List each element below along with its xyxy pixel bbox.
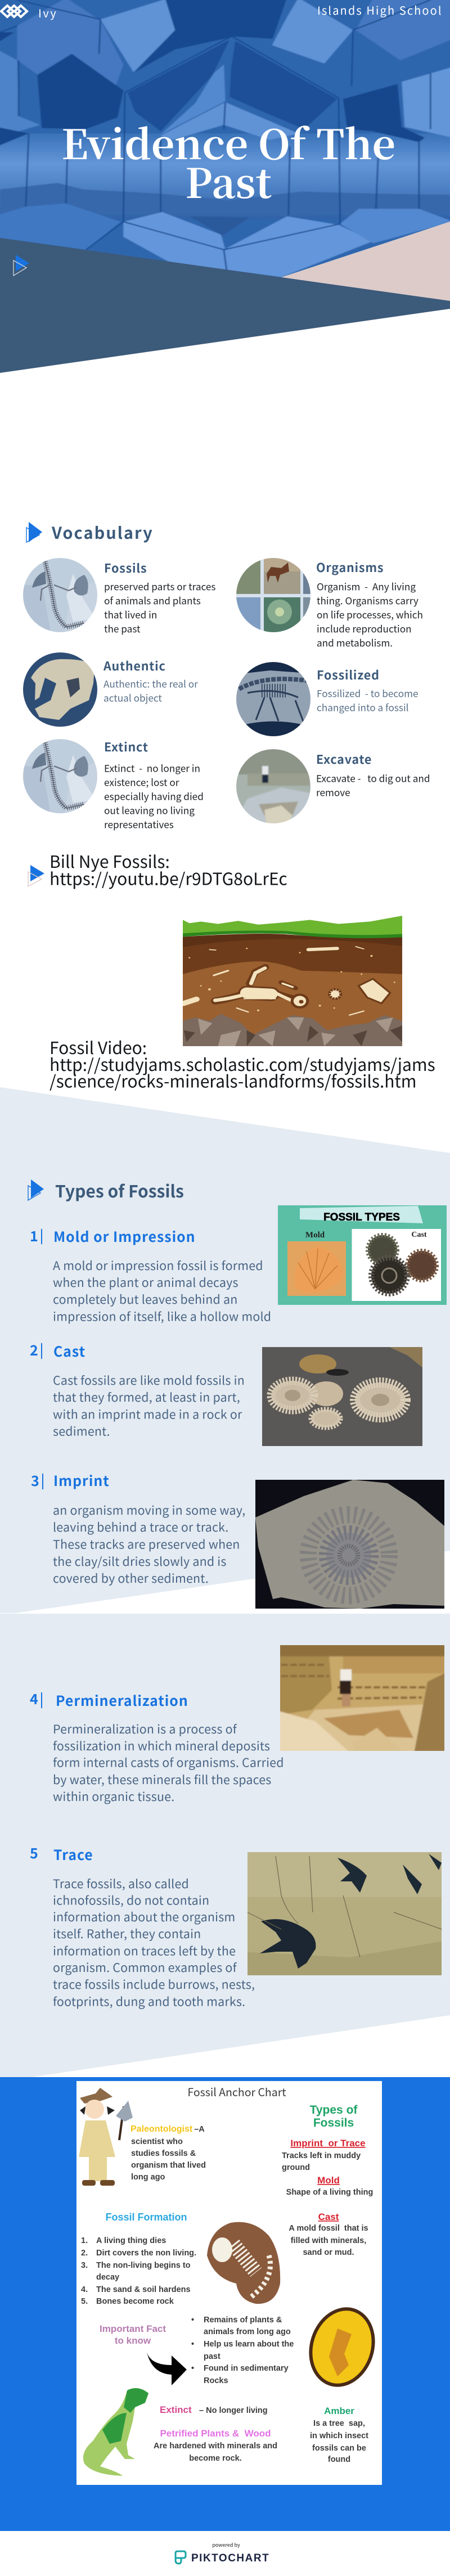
pink corner shape bbox=[281, 222, 450, 301]
number 3 bbox=[31, 1470, 43, 1490]
footer: powered by piktochart bbox=[176, 2541, 269, 2564]
petrified heading: Petrified Plants & Wood bbox=[160, 2428, 271, 2439]
permineralization description: form internal casts of organisms. Carried bbox=[53, 1754, 284, 1771]
cast ammonites photo bbox=[262, 1347, 422, 1446]
fossilized text: Fossilized bbox=[317, 666, 380, 683]
mold description: when the plant or animal decays bbox=[53, 1273, 238, 1291]
palaeontologist definition: Paleontologist bbox=[130, 2124, 193, 2134]
trace description: footprints, dung and tooth marks. bbox=[53, 1992, 245, 2010]
excavate photo bbox=[236, 749, 310, 823]
palaeontologist definition: long ago bbox=[131, 2173, 165, 2182]
fossil formation steps: decay bbox=[96, 2273, 119, 2282]
fossils photo bbox=[23, 558, 97, 632]
imprint heading: Imprint bbox=[53, 1470, 110, 1490]
fossils text: that lived in bbox=[104, 607, 157, 621]
school name: Islands High School bbox=[317, 2, 443, 18]
t-rex bbox=[83, 2388, 148, 2476]
fossil video link: http://studyjams.scholastic.com/studyjams/jams bbox=[50, 1051, 435, 1076]
types of fossils subheading: Types of bbox=[310, 2104, 358, 2116]
amber definition: Is a tree sap, bbox=[313, 2419, 365, 2428]
number 3: 3 bbox=[31, 1470, 39, 1490]
footer: powered by piktochart: powered by bbox=[212, 2541, 240, 2548]
extinct text: Extinct - no longer in bbox=[104, 760, 200, 775]
extinct text: out leaving no living bbox=[104, 803, 195, 817]
number 5: 5 bbox=[30, 1843, 38, 1863]
cast description: that they formed, at least in part, bbox=[53, 1388, 240, 1406]
vocabulary heading icon bbox=[26, 522, 42, 542]
title: Evidence Of The bbox=[61, 112, 395, 171]
types of fossils subheading: Fossils bbox=[313, 2116, 354, 2129]
extinct text: representatives bbox=[104, 817, 174, 831]
authentic text: actual object bbox=[104, 691, 162, 704]
palaeontologist figure bbox=[79, 2088, 133, 2186]
fossilized text: Fossilized - to become bbox=[317, 686, 418, 700]
extinct definition: – No longer living bbox=[199, 2406, 268, 2415]
fossils text: preserved parts or traces bbox=[104, 579, 215, 593]
palaeontologist definition: studies fossils & bbox=[131, 2149, 196, 2158]
amber heading: Amber bbox=[324, 2406, 354, 2416]
fossil types picture: FOSSIL TYPES bbox=[323, 1212, 400, 1223]
fossils text: of animals and plants bbox=[104, 593, 201, 607]
fossil formation steps: 2. bbox=[81, 2249, 88, 2258]
type 3: imprint bbox=[31, 1470, 245, 1587]
term: authentic bbox=[23, 652, 198, 727]
term: fossilized bbox=[236, 662, 418, 736]
cast description: sediment. bbox=[53, 1422, 110, 1440]
dark banner shape bbox=[0, 238, 450, 373]
important facts list: • bbox=[191, 2340, 194, 2349]
important fact label: to know bbox=[115, 2335, 151, 2346]
authentic text: Authentic: the real or bbox=[104, 676, 198, 691]
trace description: information on traces left by the bbox=[53, 1942, 236, 1960]
cast description: with an imprint made in a rock or bbox=[53, 1405, 242, 1423]
extinct text: especially having died bbox=[104, 789, 204, 803]
fossil types picture: Cast bbox=[411, 1231, 427, 1239]
important facts list: • bbox=[191, 2364, 194, 2373]
important fact label: Important Fact bbox=[100, 2323, 166, 2334]
imprint description: These tracks are preserved when bbox=[53, 1535, 240, 1552]
important facts list: past bbox=[204, 2352, 220, 2361]
cast definition: sand or mud. bbox=[303, 2248, 354, 2257]
fossil formation steps: The sand & soil hardens bbox=[96, 2285, 191, 2294]
fossilized photo bbox=[236, 662, 310, 736]
important facts list: Found in sedimentary bbox=[204, 2364, 289, 2373]
fossils text: Fossils bbox=[104, 559, 147, 577]
imprint fossil photo bbox=[255, 1480, 444, 1609]
term: fossils bbox=[23, 558, 215, 634]
permineralization description: fossilization in which mineral deposits bbox=[53, 1737, 270, 1754]
important facts list: • bbox=[191, 2316, 194, 2325]
types heading icon bbox=[28, 1179, 44, 1200]
fossil formation steps: 1. bbox=[81, 2236, 88, 2245]
permineralization photo bbox=[280, 1645, 444, 1751]
imprint description: an organism moving in some way, bbox=[53, 1501, 245, 1519]
extinct text: Extinct bbox=[104, 738, 148, 755]
excavate text: Excavate bbox=[316, 750, 372, 768]
number 4: 4 bbox=[30, 1688, 38, 1709]
fossil formation steps: Dirt covers the non living. bbox=[96, 2249, 196, 2258]
important facts list: Remains of plants & bbox=[204, 2316, 282, 2325]
types heading: Types of Fossils bbox=[55, 1178, 184, 1203]
palaeontologist definition: organism that lived bbox=[131, 2161, 206, 2170]
trace description: Trace fossils, also called bbox=[53, 1875, 189, 1892]
cast description: Cast fossils are like mold fossils in bbox=[53, 1371, 245, 1389]
light section background: lower types bbox=[0, 1614, 450, 2077]
organisms text: and metabolism. bbox=[317, 636, 393, 649]
hero play icon bbox=[14, 255, 29, 276]
petrified definition: Are hardened with minerals and bbox=[154, 2442, 277, 2451]
permineralization description: Permineralization is a process of bbox=[53, 1720, 237, 1737]
skeleton in rock bbox=[207, 2222, 280, 2304]
imprint definition: ground bbox=[282, 2163, 310, 2172]
type 4: permineralization bbox=[30, 1688, 284, 1805]
amber definition: found bbox=[328, 2455, 350, 2464]
fossil formation steps: 3. bbox=[81, 2261, 88, 2270]
mold: Mold bbox=[317, 2175, 340, 2186]
fossil video link: /science/rocks-minerals-landforms/fossils.htm bbox=[50, 1068, 417, 1092]
fossil video link: Fossil Video: bbox=[50, 1034, 147, 1059]
extinct photo bbox=[23, 739, 97, 813]
soil layers illustration with fossils bbox=[183, 916, 402, 1046]
authentic text: Authentic bbox=[103, 657, 166, 674]
logo: diamonds bbox=[1, 6, 27, 17]
mold description: completely but leaves behind an bbox=[53, 1290, 237, 1308]
blue section background bbox=[0, 2077, 450, 2531]
trace description: itself. Rather, they contain bbox=[53, 1925, 201, 1942]
fossil anchor chart bbox=[76, 2081, 383, 2485]
important facts list: Rocks bbox=[204, 2376, 228, 2385]
imprint definition: Tracks left in muddy bbox=[282, 2151, 361, 2160]
excavate text: remove bbox=[316, 785, 350, 799]
trace description: organism. Common examples of bbox=[53, 1958, 237, 1976]
piktochart logo mark bbox=[176, 2551, 186, 2564]
permineralization description: by water, these minerals fill the spaces bbox=[53, 1771, 271, 1788]
hero photo: glass facets bbox=[0, 0, 450, 285]
cast heading: Cast bbox=[53, 1341, 86, 1361]
cast definition: filled with minerals, bbox=[291, 2236, 366, 2245]
organisms text: Organisms bbox=[316, 559, 384, 576]
imprint description: the clay/silt dries slowly and is bbox=[53, 1552, 227, 1570]
piktochart wordmark: PIKTOCHART bbox=[191, 2552, 269, 2564]
chart title: Fossil Anchor Chart bbox=[187, 2083, 286, 2100]
term: excavate bbox=[236, 749, 429, 823]
trace description: trace fossils include burrows, nests, bbox=[53, 1975, 255, 1993]
trace description: information about the organism bbox=[53, 1908, 235, 1925]
fossil formation steps: Bones become rock bbox=[96, 2297, 174, 2306]
title: Past bbox=[185, 151, 272, 210]
important facts list: animals from long ago bbox=[204, 2327, 291, 2336]
extinct text: existence; lost or bbox=[104, 775, 179, 789]
amber definition: fossils can be bbox=[312, 2444, 366, 2453]
term: extinct bbox=[17, 733, 204, 831]
authentic photo bbox=[23, 652, 97, 727]
fossil types picture bbox=[278, 1205, 447, 1305]
fossil types picture: Mold bbox=[305, 1231, 325, 1240]
trace heading: Trace bbox=[53, 1844, 93, 1865]
important facts list: Help us learn about the bbox=[204, 2340, 294, 2349]
mold definition: Shape of a living thing bbox=[286, 2188, 373, 2197]
vocabulary heading: Vocabulary bbox=[51, 520, 154, 544]
amber definition: in which insect bbox=[310, 2431, 368, 2440]
imprint description: leaving behind a trace or track. bbox=[53, 1518, 229, 1535]
number 4 bbox=[30, 1688, 42, 1709]
fossilized text: changed into a fossil bbox=[317, 700, 409, 714]
cast: Cast bbox=[318, 2212, 339, 2222]
number 2: 2 bbox=[30, 1340, 38, 1360]
mold description: impression of itself, like a hollow mold bbox=[53, 1307, 271, 1325]
type 5: trace bbox=[30, 1843, 255, 2010]
type 1: mold or impression bbox=[30, 1226, 271, 1325]
number 1: 1 bbox=[30, 1226, 38, 1246]
amber bbox=[301, 2301, 383, 2393]
bill nye video link: Bill Nye Fossils: bbox=[50, 848, 170, 873]
petrified definition: become rock. bbox=[189, 2454, 242, 2463]
organisms photo bbox=[236, 558, 310, 632]
trace footprints photo bbox=[248, 1852, 442, 1975]
fossil formation steps: The non-living begins to bbox=[96, 2261, 191, 2270]
permineralization description: within organic tissue. bbox=[53, 1787, 174, 1805]
fossils text: the past bbox=[104, 621, 141, 636]
imprint description: covered by other sediment. bbox=[53, 1569, 209, 1587]
arrow bbox=[147, 2352, 187, 2385]
organisms text: thing. Organisms carry bbox=[317, 593, 418, 607]
mold heading: Mold or Impression bbox=[53, 1226, 196, 1246]
cast definition: A mold fossil that is bbox=[289, 2224, 368, 2233]
brand name: Ivy bbox=[38, 4, 57, 21]
fossil formation steps: 5. bbox=[81, 2297, 88, 2306]
excavate text: Excavate - to dig out and bbox=[316, 771, 430, 785]
term: organisms bbox=[236, 558, 422, 647]
trace description: ichnofossils, do not contain bbox=[53, 1891, 209, 1909]
video link icon bbox=[28, 865, 44, 886]
type 2: cast bbox=[30, 1340, 245, 1440]
light section background: vocabulary to types bbox=[0, 1087, 450, 1613]
number 1 bbox=[30, 1226, 42, 1246]
number 2 bbox=[30, 1340, 42, 1360]
organisms text: Organism - Any living bbox=[317, 579, 416, 593]
fossil formation heading: Fossil Formation bbox=[105, 2212, 187, 2223]
mold description: A mold or impression fossil is formed bbox=[53, 1257, 263, 1274]
organisms text: include reproduction bbox=[317, 621, 412, 636]
palaeontologist definition: scientist who bbox=[131, 2137, 183, 2146]
bill nye video link: https://youtu.be/r9DTG8oLrEc bbox=[50, 865, 287, 890]
fossil formation steps: 4. bbox=[81, 2285, 88, 2294]
imprint or trace: Imprint or Trace bbox=[290, 2138, 366, 2149]
fossil formation steps: A living thing dies bbox=[96, 2236, 166, 2245]
permineralization heading: Permineralization bbox=[56, 1690, 188, 1710]
extinct definition: Extinct bbox=[160, 2404, 192, 2415]
organisms text: on life processes, which bbox=[317, 607, 423, 621]
palaeontologist definition: –A bbox=[194, 2125, 205, 2134]
